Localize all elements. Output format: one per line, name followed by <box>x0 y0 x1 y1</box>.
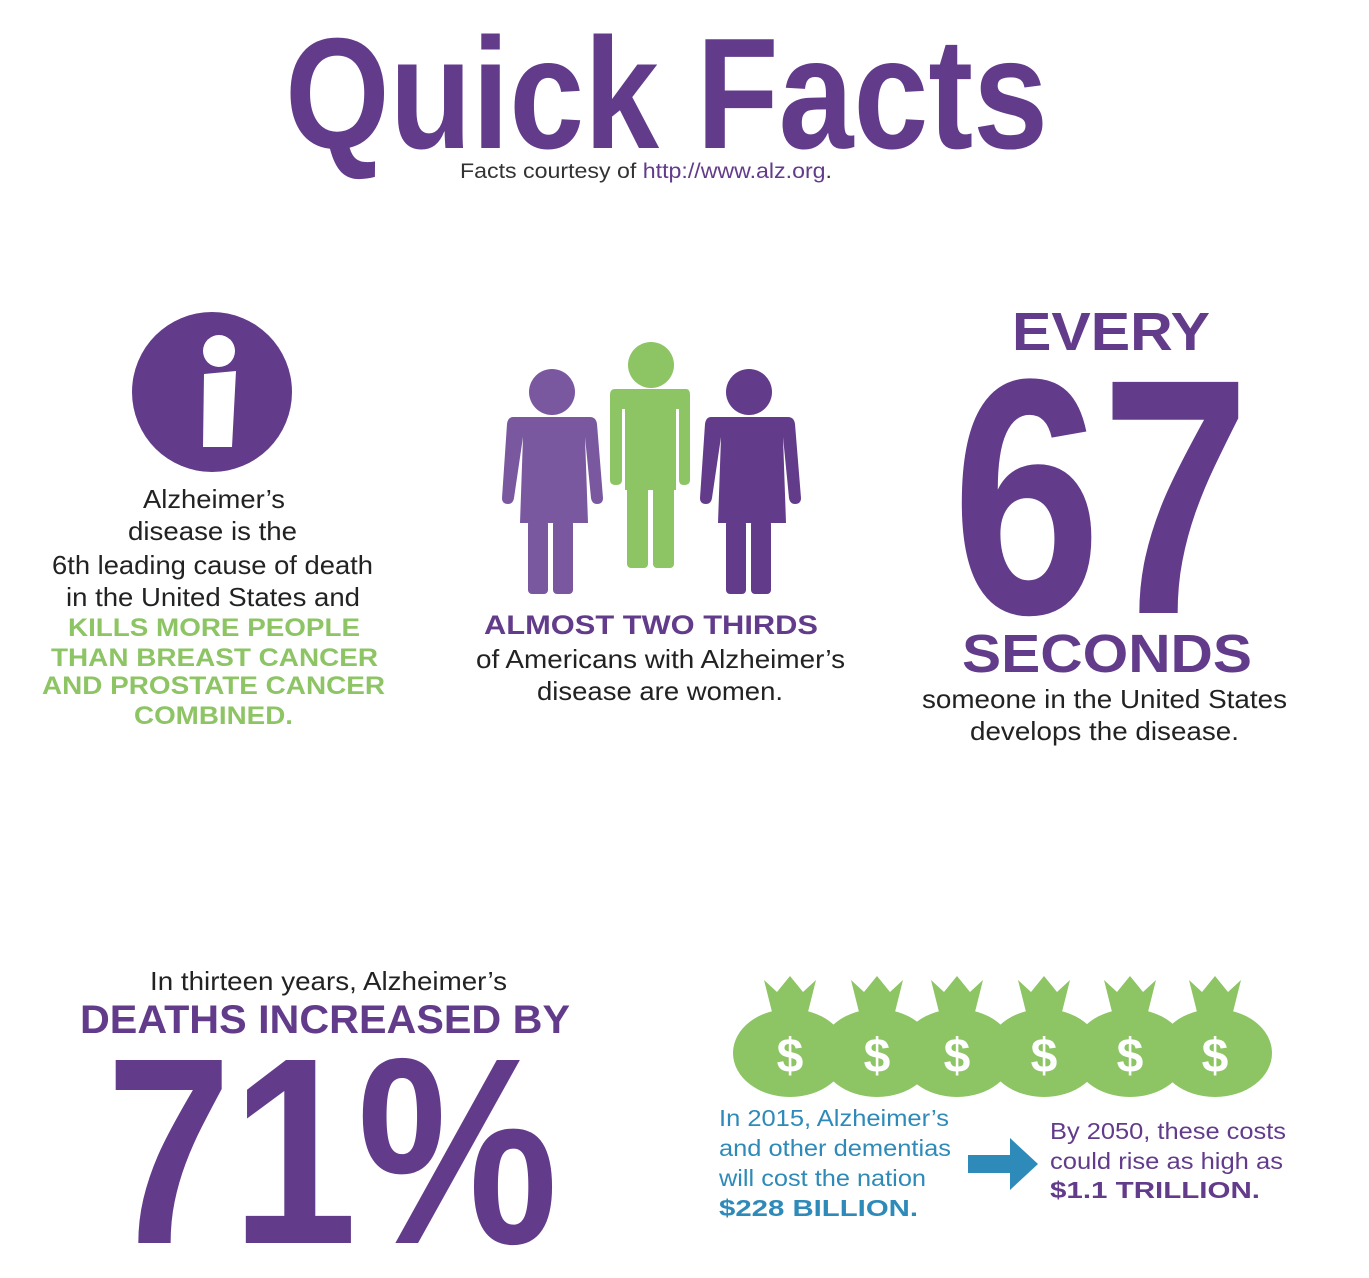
text: 2015 cost: $228 BILLION. <box>719 1195 918 1221</box>
text: 2015 cost <box>718 1105 951 1221</box>
text: 2015 cost: will cost the nation <box>718 1165 926 1191</box>
text: 2050 cost: By 2050, these costs <box>1050 1118 1286 1144</box>
panel: costs <box>718 976 1286 1221</box>
icon: info circle <box>132 312 292 472</box>
title: Quick Facts <box>285 6 1048 182</box>
icon: money bags: $ <box>1202 1030 1229 1083</box>
text: 2015 cost: In 2015, Alzheimer’s <box>719 1105 949 1131</box>
text: leading cause: THAN BREAST CANCER <box>51 644 378 672</box>
text: leading cause <box>42 484 385 730</box>
text: 2050 cost: could rise as high as <box>1050 1148 1283 1174</box>
icon: money bags: $ <box>944 1030 971 1083</box>
panel: every 67 seconds <box>922 302 1287 746</box>
text: leading cause: 6th leading cause of death <box>52 550 373 580</box>
icon: people <box>502 342 801 594</box>
icon: money bags: $ <box>1031 1030 1058 1083</box>
text: intro: In thirteen years, Alzheimer’s <box>150 966 507 996</box>
text: 2050 cost: $1.1 TRILLION. <box>1050 1177 1260 1203</box>
panel: two thirds women <box>476 342 845 706</box>
text: 2050 cost <box>1050 1118 1286 1203</box>
text: two thirds: ALMOST TWO THIRDS <box>484 610 818 640</box>
text: develops <box>922 684 1287 746</box>
text: leading cause: disease is the <box>128 516 297 546</box>
icon: money bags: $ <box>864 1030 891 1083</box>
heading: deaths increased: DEATHS INCREASED BY <box>80 998 570 1042</box>
text: leading cause: in the United States and <box>66 582 360 612</box>
panel: deaths increased <box>80 966 570 1278</box>
text: leading cause: KILLS MORE PEOPLE <box>68 614 360 642</box>
arrow <box>968 1138 1038 1190</box>
text: develops: develops the disease. <box>970 716 1239 746</box>
icon: money bags: $ <box>1117 1030 1144 1083</box>
text: develops: someone in the United States <box>922 684 1287 714</box>
panel: leading cause <box>42 312 385 730</box>
heading: seconds: SECONDS <box>962 624 1252 684</box>
text: two thirds: of Americans with Alzheimer’s <box>476 644 845 674</box>
subtitle credit: Facts courtesy of http://www.alz.org . <box>460 160 832 183</box>
text: 2015 cost: and other dementias <box>719 1135 951 1161</box>
icon: money bags <box>733 976 1272 1097</box>
text: two thirds <box>476 610 845 706</box>
text: two thirds: disease are women. <box>537 676 783 706</box>
icon: money bags: $ <box>777 1030 804 1083</box>
text: leading cause: Alzheimer’s <box>143 484 285 514</box>
heading: every: EVERY <box>1012 302 1210 362</box>
text: leading cause: COMBINED. <box>134 702 293 730</box>
text: leading cause: AND PROSTATE CANCER <box>42 672 385 700</box>
big number 67: 67 <box>952 310 1250 685</box>
